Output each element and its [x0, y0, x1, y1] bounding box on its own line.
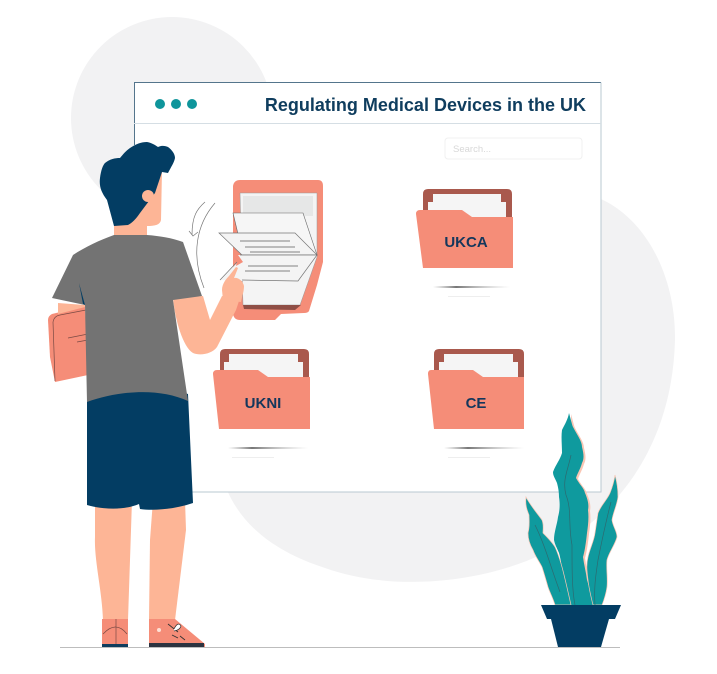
ear [142, 190, 154, 202]
legs [95, 500, 132, 620]
center leaf [553, 413, 593, 605]
label UKCA: UKCA [444, 234, 488, 251]
shirt [52, 235, 202, 402]
browser window [134, 82, 601, 492]
search box: Search... [453, 144, 491, 155]
shoes [102, 619, 128, 647]
window dots [155, 99, 197, 109]
right leaf [587, 475, 618, 605]
folder UKCA [416, 189, 513, 297]
plant [526, 413, 618, 606]
background blob: top left circle [71, 17, 273, 219]
page-turn arrows [189, 202, 215, 288]
search box [445, 138, 582, 159]
plant pot [541, 605, 621, 647]
folder UKNI [213, 349, 310, 458]
title: Regulating Medical Devices in the UK [265, 95, 586, 115]
left leaf [526, 497, 571, 605]
background blob: right [225, 195, 675, 582]
hand with finger [222, 267, 244, 302]
floor line [60, 647, 620, 648]
shorts [87, 389, 193, 510]
label UKNI: UKNI [245, 395, 281, 412]
folder under arm [48, 306, 88, 382]
right arm [173, 296, 240, 354]
open document folder [219, 180, 323, 320]
folder CE [428, 349, 524, 458]
person [48, 142, 244, 647]
hair [100, 142, 175, 226]
leaf shadow [571, 414, 595, 606]
left arm stub [58, 303, 85, 314]
head skin [110, 170, 162, 227]
label CE: CE [466, 395, 486, 412]
neck [114, 215, 147, 240]
